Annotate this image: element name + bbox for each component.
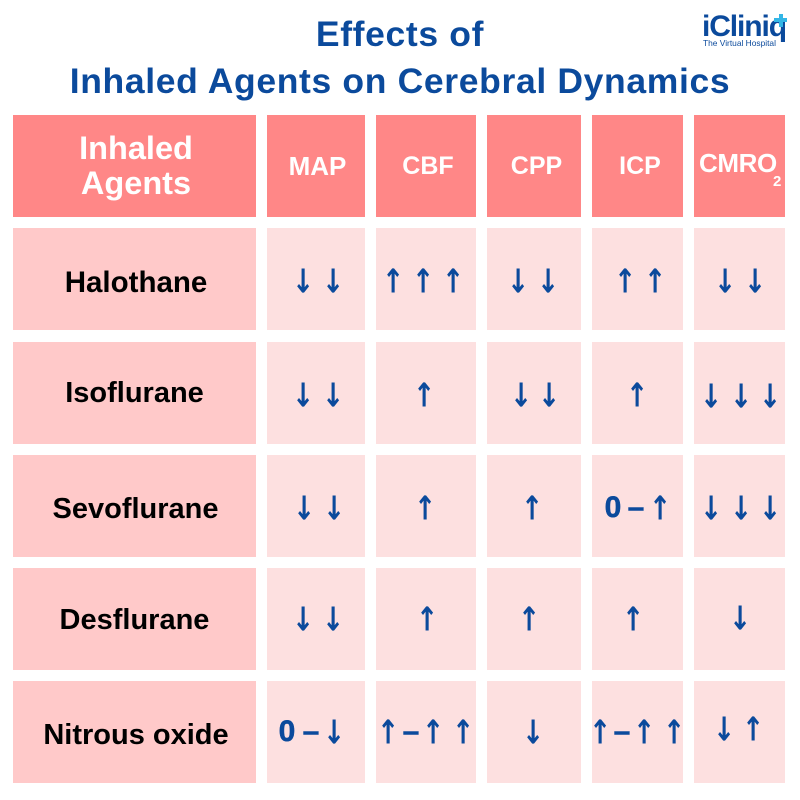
cell: Isoflurane MAP: ↓ [292, 376, 314, 414]
cell: Desflurane ICP [592, 568, 683, 670]
cell: Sevoflurane CBF: ↑ [414, 488, 436, 528]
cell: Sevoflurane CPP [487, 455, 581, 557]
cell: Halothane CMRO2: ↓ [714, 262, 736, 300]
title: Inhaled Agents on Cerebral Dynamics [70, 60, 730, 100]
cell: Nitrous oxide ICP: – [614, 715, 630, 748]
cell: Sevoflurane CMRO2: ↓ [730, 488, 752, 528]
cell: Halothane CPP: ↓ [537, 262, 559, 300]
cell: Desflurane MAP: ↓ [292, 600, 314, 638]
cell: Nitrous oxide CPP [487, 681, 581, 783]
cell: Halothane ICP [592, 228, 683, 330]
cell: Nitrous oxide CMRO2: ↑ [742, 710, 764, 748]
cell: Isoflurane CBF: ↑ [413, 376, 435, 414]
cell: Halothane CBF: ↑ [442, 262, 464, 300]
cell: Halothane CBF: ↑ [382, 262, 404, 300]
cell: Nitrous oxide ICP: ↑ [589, 712, 611, 752]
cell: Desflurane CBF [376, 568, 476, 670]
row: Sevoflurane [13, 455, 256, 557]
row: Halothane: Halothane [65, 266, 207, 299]
cell: Desflurane MAP: ↓ [322, 600, 344, 638]
row: Desflurane: Desflurane [60, 604, 209, 636]
cell: Halothane CBF [376, 228, 476, 330]
cell: Nitrous oxide CBF: ↑ [452, 712, 474, 752]
cell: Nitrous oxide MAP: ↓ [323, 712, 345, 752]
cell: Halothane ICP: ↑ [614, 262, 636, 300]
cell: Nitrous oxide CBF: ↑ [422, 712, 444, 752]
cell: Isoflurane MAP [267, 342, 365, 444]
cell: Desflurane CPP [487, 568, 581, 670]
header: MAP: MAP [289, 150, 346, 180]
header: ICP: ICP [619, 152, 661, 180]
cell: Isoflurane CBF [376, 342, 476, 444]
header: CPP [487, 115, 581, 217]
cell: Nitrous oxide CPP: ↓ [522, 712, 544, 752]
cell: Desflurane CPP: ↑ [518, 600, 540, 638]
cell: Isoflurane ICP [592, 342, 683, 444]
header: Inhaled Agents: Inhaled [79, 130, 193, 166]
logo: iCliniq: The Virtual Hospital [703, 38, 776, 48]
row: Isoflurane [13, 342, 256, 444]
logo: iCliniq: iCliniq [702, 10, 786, 43]
header: CBF: CBF [402, 152, 454, 180]
cell: Halothane MAP: ↓ [322, 262, 344, 300]
cell: Halothane CMRO2: ↓ [744, 262, 766, 300]
header: CMRO2: 2 [773, 173, 781, 190]
cell: Sevoflurane ICP: 0 [605, 491, 621, 524]
cell: Desflurane MAP [267, 568, 365, 670]
cell: Isoflurane MAP: ↓ [322, 376, 344, 414]
cell: Nitrous oxide ICP [592, 681, 683, 783]
row: Nitrous oxide [13, 681, 256, 783]
cell: Isoflurane CMRO2: ↓ [759, 376, 781, 416]
cell: Sevoflurane CMRO2: ↓ [700, 488, 722, 528]
cell: Halothane CBF: ↑ [412, 262, 434, 300]
cell: Desflurane CMRO2 [694, 568, 785, 670]
cell: Sevoflurane CMRO2: ↓ [759, 488, 781, 528]
cell: Nitrous oxide MAP: – [303, 715, 319, 748]
header: Inhaled Agents [13, 115, 256, 217]
row: Halothane [13, 228, 256, 330]
cell: Nitrous oxide CBF: ↑ [377, 712, 399, 752]
header: CMRO2 [694, 115, 785, 217]
header: ICP [592, 115, 683, 217]
cell: Sevoflurane ICP [592, 455, 683, 557]
cell: Halothane CMRO2 [694, 228, 785, 330]
cell: Desflurane CBF: ↑ [416, 600, 438, 638]
row: Sevoflurane: Sevoflurane [52, 492, 218, 524]
cell: Nitrous oxide MAP [267, 681, 365, 783]
cell: Desflurane ICP: ↑ [622, 600, 644, 638]
header: CPP: CPP [511, 152, 562, 180]
cell: Isoflurane ICP: ↑ [626, 376, 648, 414]
cell: Nitrous oxide CBF: – [403, 715, 419, 748]
cell: Nitrous oxide CBF [376, 681, 476, 783]
title: Effects of [316, 14, 484, 54]
cell: Isoflurane CMRO2 [694, 342, 785, 444]
cell: Sevoflurane MAP: ↓ [293, 488, 315, 528]
cell: Nitrous oxide CMRO2: ↓ [713, 710, 735, 748]
cell: Halothane CPP: ↓ [507, 262, 529, 300]
cell: Halothane MAP [267, 228, 365, 330]
cell: Desflurane CMRO2: ↓ [729, 598, 751, 638]
cell: Sevoflurane MAP [267, 455, 365, 557]
cell: Halothane CPP [487, 228, 581, 330]
header: CMRO2: CMRO [699, 148, 777, 178]
cell: Halothane MAP: ↓ [292, 262, 314, 300]
row: Nitrous oxide: Nitrous oxide [43, 718, 229, 750]
cell: Isoflurane CMRO2: ↓ [700, 376, 722, 416]
cell: Isoflurane CPP [487, 342, 581, 444]
header: CBF [376, 115, 476, 217]
title [70, 14, 730, 100]
cell: Sevoflurane ICP: – [628, 491, 644, 524]
cell: Halothane ICP: ↑ [644, 262, 666, 300]
cell: Nitrous oxide MAP: 0 [279, 715, 295, 748]
cell: Nitrous oxide ICP: ↑ [633, 712, 655, 752]
cell: Isoflurane CMRO2: ↓ [730, 376, 752, 416]
cell: Sevoflurane CBF [376, 455, 476, 557]
cell: Sevoflurane MAP: ↓ [323, 488, 345, 528]
cell: Nitrous oxide ICP: ↑ [663, 712, 685, 752]
row: Desflurane [13, 568, 256, 670]
header: Inhaled Agents: Agents [81, 164, 191, 200]
cell: Sevoflurane ICP: ↑ [649, 488, 671, 528]
cell: Isoflurane CPP: ↓ [538, 376, 560, 414]
cell: Sevoflurane CPP: ↑ [521, 488, 543, 528]
row: Isoflurane: Isoflurane [65, 377, 204, 409]
header: MAP [267, 115, 365, 217]
cell: Isoflurane CPP: ↓ [510, 376, 532, 414]
cell: Sevoflurane CMRO2 [694, 455, 785, 557]
cell: Nitrous oxide CMRO2 [694, 681, 785, 783]
